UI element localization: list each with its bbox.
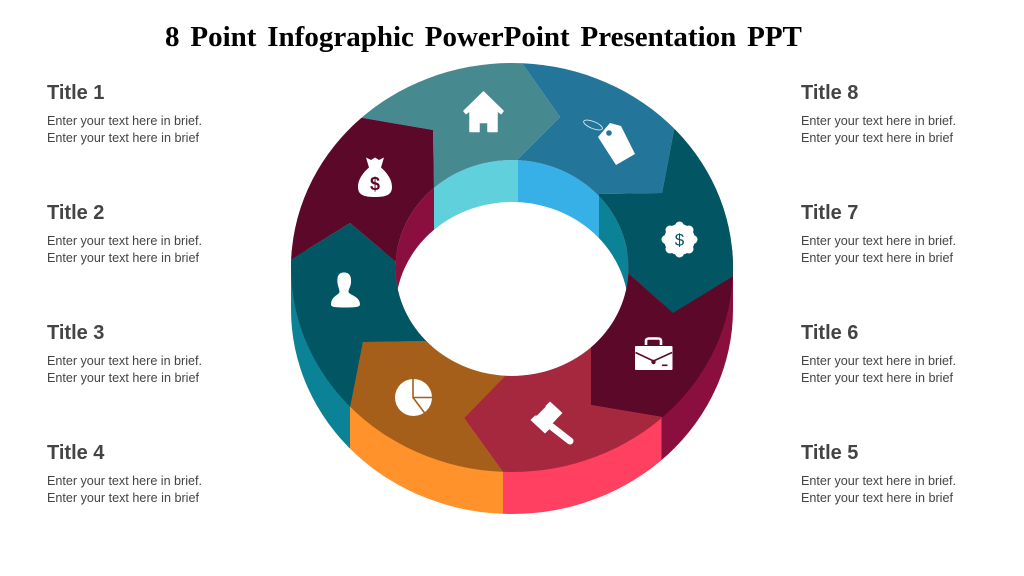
text block: title 8: Enter your text here in brief. — [801, 114, 956, 128]
text block: title 1: Title 1 — [47, 82, 104, 104]
text block: title 2: Enter your text here in brief — [47, 251, 200, 265]
segment: gear — [599, 128, 733, 313]
ring top face segments — [291, 63, 733, 472]
icon: money bag — [358, 158, 392, 197]
text block: title 2: Title 2 — [47, 202, 104, 224]
text block: title 8 — [801, 82, 956, 145]
text block: title 4: Enter your text here in brief. — [47, 474, 202, 488]
segment: person — [291, 223, 428, 407]
icon: briefcase — [635, 338, 672, 370]
text block: title 4: Enter your text here in brief — [47, 491, 200, 505]
text block: title 6 — [801, 322, 956, 385]
segment: money bag — [291, 118, 434, 262]
text block: title 3: Enter your text here in brief. — [47, 354, 202, 368]
ring outer side wall — [285, 250, 736, 520]
text block: title 2: Enter your text here in brief. — [47, 234, 202, 248]
icon: gear with dollar — [662, 222, 698, 258]
segment: home — [361, 63, 560, 188]
text block: title 3: Enter your text here in brief — [47, 371, 200, 385]
icon: house — [464, 92, 503, 132]
text block: title 4 — [47, 442, 202, 505]
text block: title 5: Enter your text here in brief — [801, 491, 954, 505]
text block: title 8: Enter your text here in brief — [801, 131, 954, 145]
icon: gavel — [531, 402, 570, 441]
icon: money bag: $ — [370, 174, 380, 194]
text block: title 6: Enter your text here in brief. — [801, 354, 956, 368]
text block: title 2 — [47, 202, 202, 265]
text block: title 6: Enter your text here in brief — [801, 371, 954, 385]
text block: title 4: Title 4 — [47, 442, 105, 464]
text block: title 1: Enter your text here in brief. — [47, 114, 202, 128]
text block: title 5: Title 5 — [801, 442, 858, 464]
segment: briefcase — [591, 273, 733, 417]
text block: title 3: Title 3 — [47, 322, 104, 344]
text block: title 8: Title 8 — [801, 82, 858, 104]
segment: gavel — [464, 347, 662, 472]
text block: title 3 — [47, 322, 202, 385]
segment: price tag — [518, 63, 674, 196]
text block: title 1 — [47, 82, 202, 145]
text block: title 6: Title 6 — [801, 322, 858, 344]
text block: title 7: Enter your text here in brief. — [801, 234, 956, 248]
text block: title 7: Title 7 — [801, 202, 858, 224]
icon: person — [331, 272, 360, 308]
segment: pie chart — [350, 340, 506, 472]
text block: title 1: Enter your text here in brief — [47, 131, 200, 145]
text block: title 7: Enter your text here in brief — [801, 251, 954, 265]
text block: title 5: Enter your text here in brief. — [801, 474, 956, 488]
text block: title 5 — [801, 442, 956, 505]
icon: gear with dollar: $ — [675, 230, 685, 250]
title: 8 Point Infographic PowerPoint Presentation PPT — [165, 21, 802, 53]
ring inner wall — [396, 160, 628, 376]
text block: title 7 — [801, 202, 956, 265]
icon: price tag — [582, 118, 635, 165]
icon: pie chart — [395, 378, 432, 416]
